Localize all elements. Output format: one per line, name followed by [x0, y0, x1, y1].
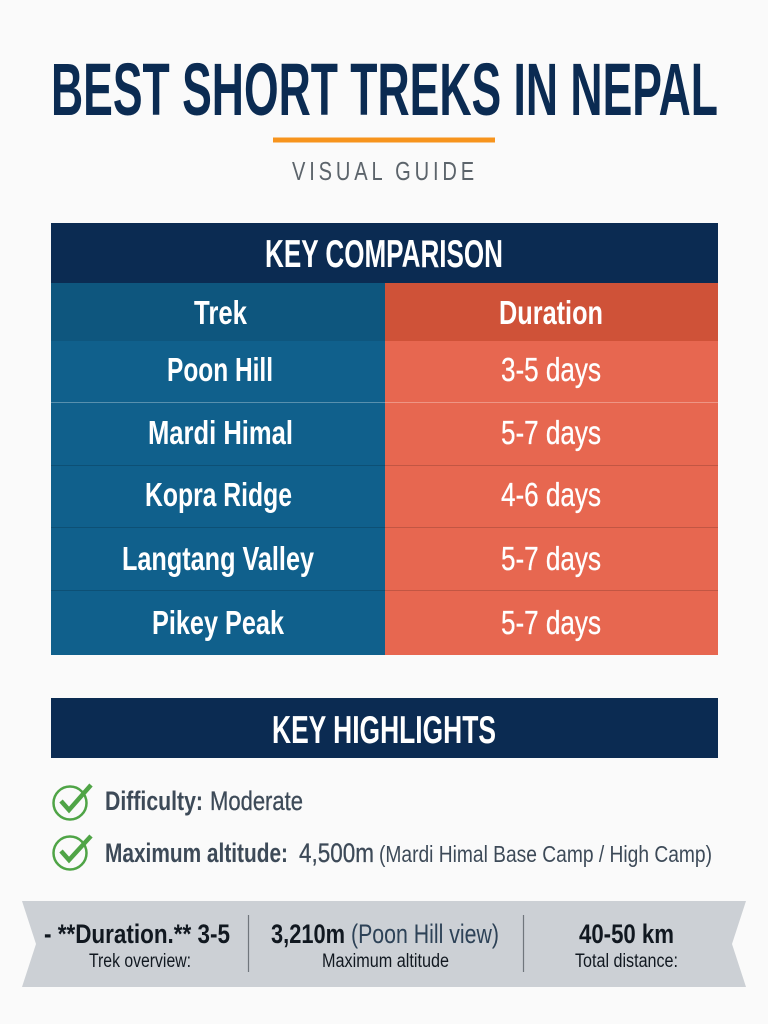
table heading: KEY COMPARISON [265, 233, 503, 276]
highlight: maximum altitude: (Mardi Himal Base Camp / High Camp) [379, 841, 712, 867]
stat: maximum altitude: Maximum altitude [322, 951, 449, 972]
row: Langtang Valley: Langtang Valley [122, 540, 314, 577]
panel: key comparison table [51, 223, 718, 655]
row: Poon Hill: Poon Hill [167, 351, 273, 388]
icon: altitude check [54, 836, 91, 870]
highlight: difficulty: Difficulty: [105, 786, 203, 816]
column header: duration [385, 283, 718, 341]
row: Poon Hill [51, 341, 718, 403]
stat: maximum altitude [271, 919, 499, 972]
column header: trek [51, 283, 385, 341]
highlight: difficulty [105, 786, 303, 816]
row: Langtang Valley: 5-7 days [501, 540, 601, 577]
highlight: difficulty: Moderate [210, 786, 303, 816]
row: Poon Hill: 3-5 days [501, 351, 601, 388]
stat: total distance: 40-50 km [579, 919, 674, 949]
row: Mardi Himal [51, 403, 718, 466]
stat: total distance [575, 919, 678, 972]
row: Mardi Himal: Mardi Himal [148, 414, 293, 451]
stat: trek overview [44, 919, 230, 972]
stat: trek overview: Trek overview: [89, 951, 191, 972]
highlight: maximum altitude [105, 838, 712, 868]
column header: duration: Duration [499, 294, 603, 331]
row: Pikey Peak: 5-7 days [501, 604, 601, 641]
panel: summary ribbon [22, 901, 746, 987]
row: Mardi Himal: 5-7 days [501, 414, 601, 451]
stat: total distance: Total distance: [575, 951, 678, 972]
highlight: maximum altitude: Maximum altitude: [105, 838, 288, 868]
row: Pikey Peak [51, 591, 718, 655]
table heading [51, 223, 718, 283]
highlight: maximum altitude: 4,500m [299, 838, 374, 868]
stat: maximum altitude: (Poon Hill view) [351, 919, 499, 949]
heading: key highlights: KEY HIGHLIGHTS [272, 709, 496, 752]
row: Pikey Peak: Pikey Peak [152, 604, 284, 641]
row: Kopra Ridge [51, 466, 718, 528]
stat: trek overview: - **Duration.** 3-5 [44, 919, 230, 949]
column header: trek: Trek [194, 294, 248, 331]
row: Kopra Ridge: Kopra Ridge [145, 476, 292, 513]
subtitle: VISUAL GUIDE [292, 156, 478, 186]
row: Langtang Valley [51, 528, 718, 591]
stat: maximum altitude: 3,210m [271, 919, 345, 949]
heading: key highlights [51, 698, 718, 758]
row: Kopra Ridge: 4-6 days [501, 476, 601, 513]
title accent bar [273, 138, 495, 142]
icon: difficulty check [54, 785, 91, 820]
